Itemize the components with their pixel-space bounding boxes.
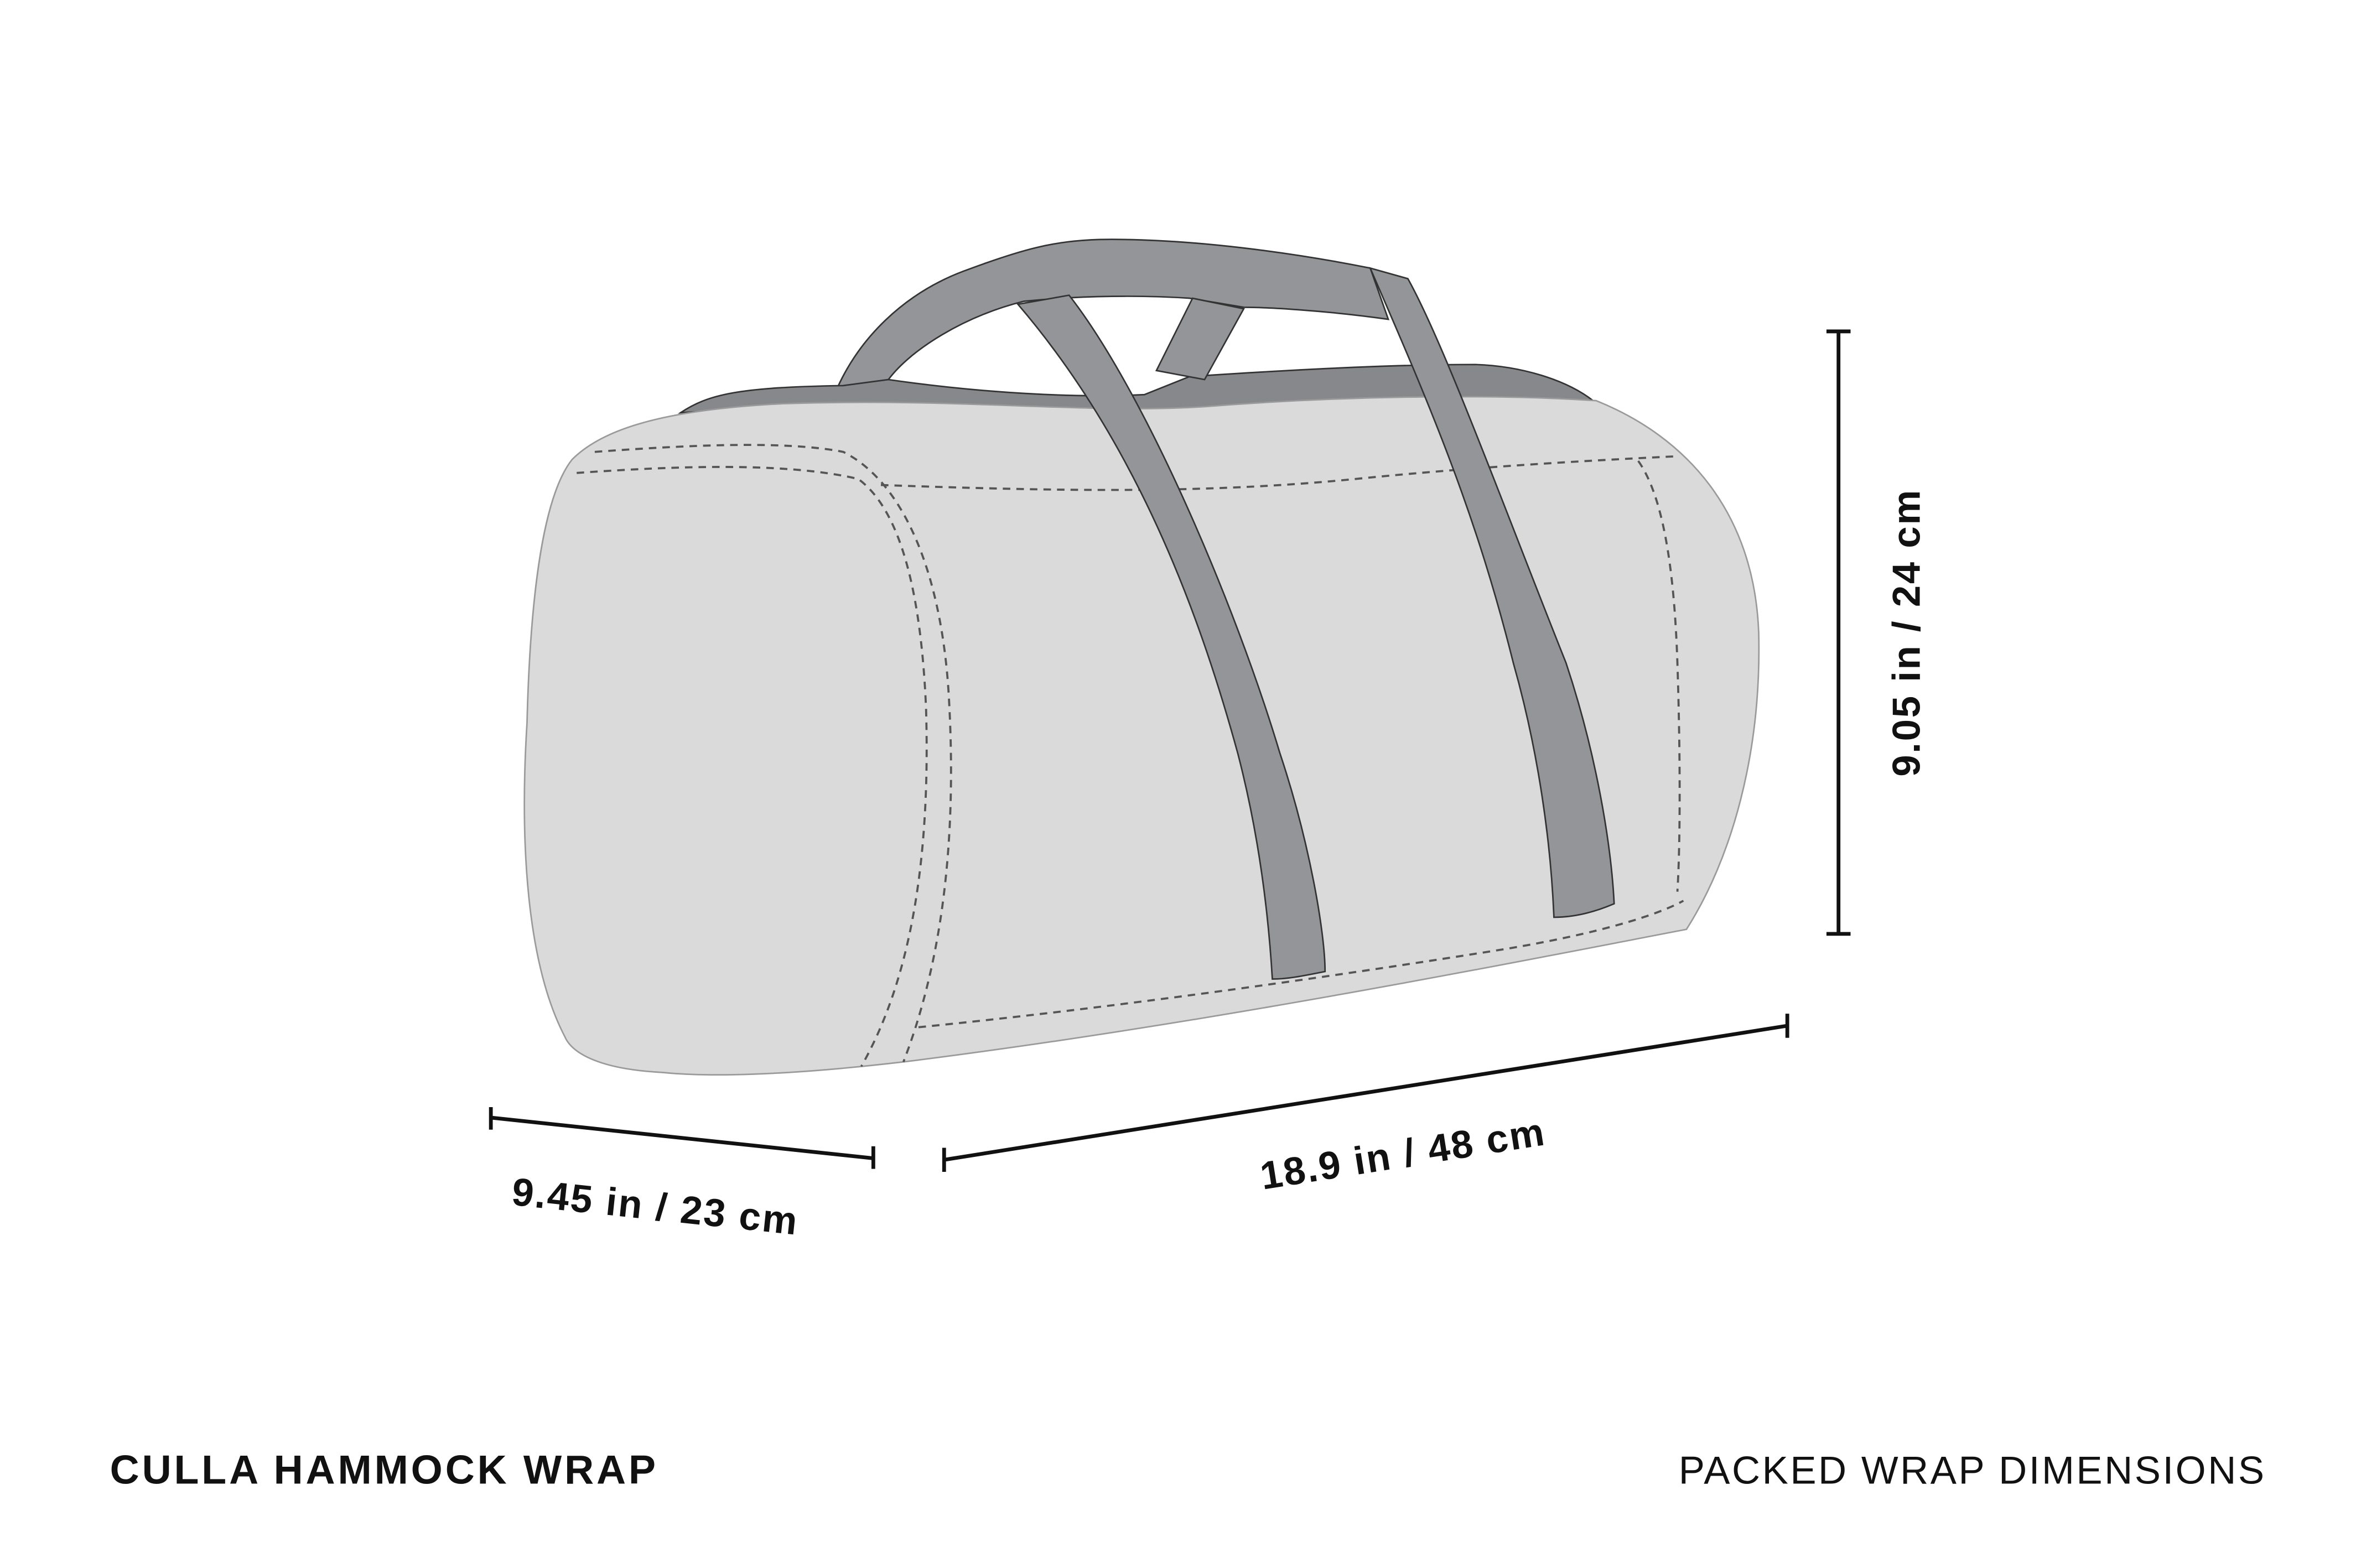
dimension: length: 18.9 in / 48 cm <box>1257 1109 1549 1198</box>
footer subtitle: PACKED WRAP DIMENSIONS <box>1679 1448 2266 1492</box>
back handle <box>836 240 1388 392</box>
illustration: packed hammock wrap bag <box>525 240 1759 1075</box>
top rim <box>681 365 1593 414</box>
footer title: CULLA HAMMOCK WRAP <box>110 1447 658 1493</box>
dimension: height: 9.05 in / 24 cm <box>1884 489 1928 777</box>
front straps <box>1018 268 1614 979</box>
seams <box>577 445 1683 1066</box>
dimension: height <box>1826 331 1928 934</box>
bag body <box>525 397 1759 1075</box>
dimension: width: 9.45 in / 23 cm <box>510 1170 801 1243</box>
dimension: length <box>944 1014 1787 1198</box>
dimension: width <box>491 1107 873 1243</box>
